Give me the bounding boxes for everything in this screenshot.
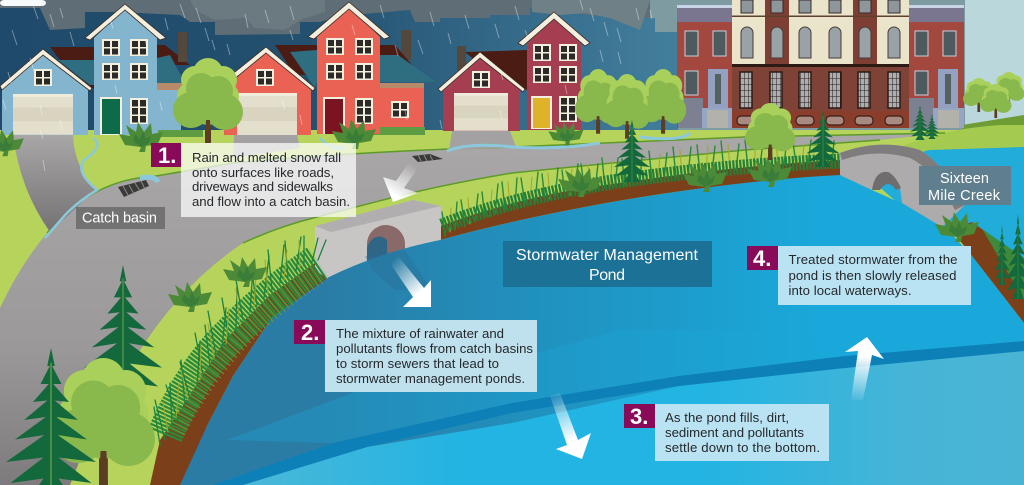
callout: step 1: [151, 143, 356, 217]
road: [0, 133, 945, 485]
house 3: red garage: [224, 47, 315, 135]
callout: step 4: 4.: [753, 246, 771, 271]
stone bridge: [840, 145, 965, 227]
dark water band: [213, 341, 1024, 485]
label: stormwater management pond: Pond: [589, 267, 625, 284]
house 4: tall red: [308, 2, 409, 134]
callout: step 2: [294, 320, 537, 392]
step 3 arrow: [550, 393, 591, 459]
callout: step 3: settle down to the bottom.: [665, 440, 820, 455]
culvert outflow shading: [365, 250, 432, 290]
pond water: [180, 175, 1024, 485]
callout: step 2: The mixture of rainwater and: [336, 326, 504, 341]
roofs and wings behind houses: [50, 30, 527, 135]
icon: catch basin grate left: [118, 180, 149, 197]
far bank and right corner: [950, 205, 1024, 323]
fir trees: [84, 105, 1024, 400]
label: sixteen mile creek: Sixteen: [940, 171, 989, 187]
callout: step 3: 3.: [630, 404, 648, 429]
hedges at house base: [158, 126, 425, 137]
step 1 arrow: [383, 164, 418, 202]
callout: step 2: 2.: [301, 320, 319, 345]
icon: catch basin grate right: [412, 154, 443, 162]
callout: step 1: 1.: [158, 143, 176, 168]
apartment building: [677, 0, 964, 128]
creek water: [860, 147, 1024, 258]
callout: step 1: driveways and sidewalks: [192, 179, 333, 194]
label: stormwater management pond: [503, 241, 712, 287]
house 6: garnet tall: [518, 12, 590, 130]
fir tree lower left: [6, 348, 96, 485]
label: catch basin: [76, 207, 165, 229]
tree cluster behind road: [575, 69, 686, 139]
stormy sky background: [0, 0, 1024, 140]
tree lower left: [52, 358, 155, 485]
step 2 arrow: [390, 256, 431, 307]
callout: step 4: Treated stormwater from the: [788, 252, 958, 267]
tree: front of blue house: [173, 58, 243, 143]
light water shading: [227, 256, 1024, 443]
ground and hillside: [0, 115, 1024, 485]
driveways: [13, 131, 516, 232]
house 2: tall blue: [85, 4, 166, 135]
callout: step 1: and flow into a catch basin.: [192, 194, 350, 209]
step 4 arrow: [845, 337, 884, 400]
tree by apartment: [745, 103, 795, 160]
callout: step 4: into local waterways.: [788, 283, 912, 298]
streams flowing to catch basins: [45, 133, 690, 238]
house 1: blue garage: [0, 49, 92, 135]
callout: step 3: As the pond fills, dirt,: [665, 410, 789, 425]
callout: step 2: stormwater management ponds.: [336, 371, 525, 386]
label: sixteen mile creek: [919, 166, 1011, 205]
sediment layer: [240, 351, 1024, 485]
label: sixteen mile creek: Mile Creek: [928, 188, 1001, 204]
callout: step 1: onto surfaces like roads,: [192, 165, 334, 180]
houses row: [0, 2, 590, 137]
callout: step 2: to storm sewers that lead to: [336, 356, 499, 371]
callout: step 4: [747, 246, 971, 305]
house 5: garnet garage: [438, 52, 525, 131]
callout: step 2: pollutants flows from catch basins: [336, 341, 533, 356]
label: stormwater management pond: Stormwater Management: [516, 247, 699, 264]
grass along pond bank: [154, 139, 840, 445]
rain: [3, 0, 652, 171]
plants and bushes: [0, 119, 979, 312]
callout: step 1: Rain and melted snow fall: [192, 150, 341, 165]
tree cluster right: [963, 72, 1024, 118]
callout: step 4: pond is then slowly released: [788, 268, 956, 283]
bank soil: [150, 160, 842, 485]
culvert headwall: [315, 200, 441, 280]
callout: step 3: sediment and pollutants: [665, 425, 804, 440]
callout: step 3: [624, 404, 829, 461]
label: catch basin: Catch basin: [82, 210, 157, 226]
